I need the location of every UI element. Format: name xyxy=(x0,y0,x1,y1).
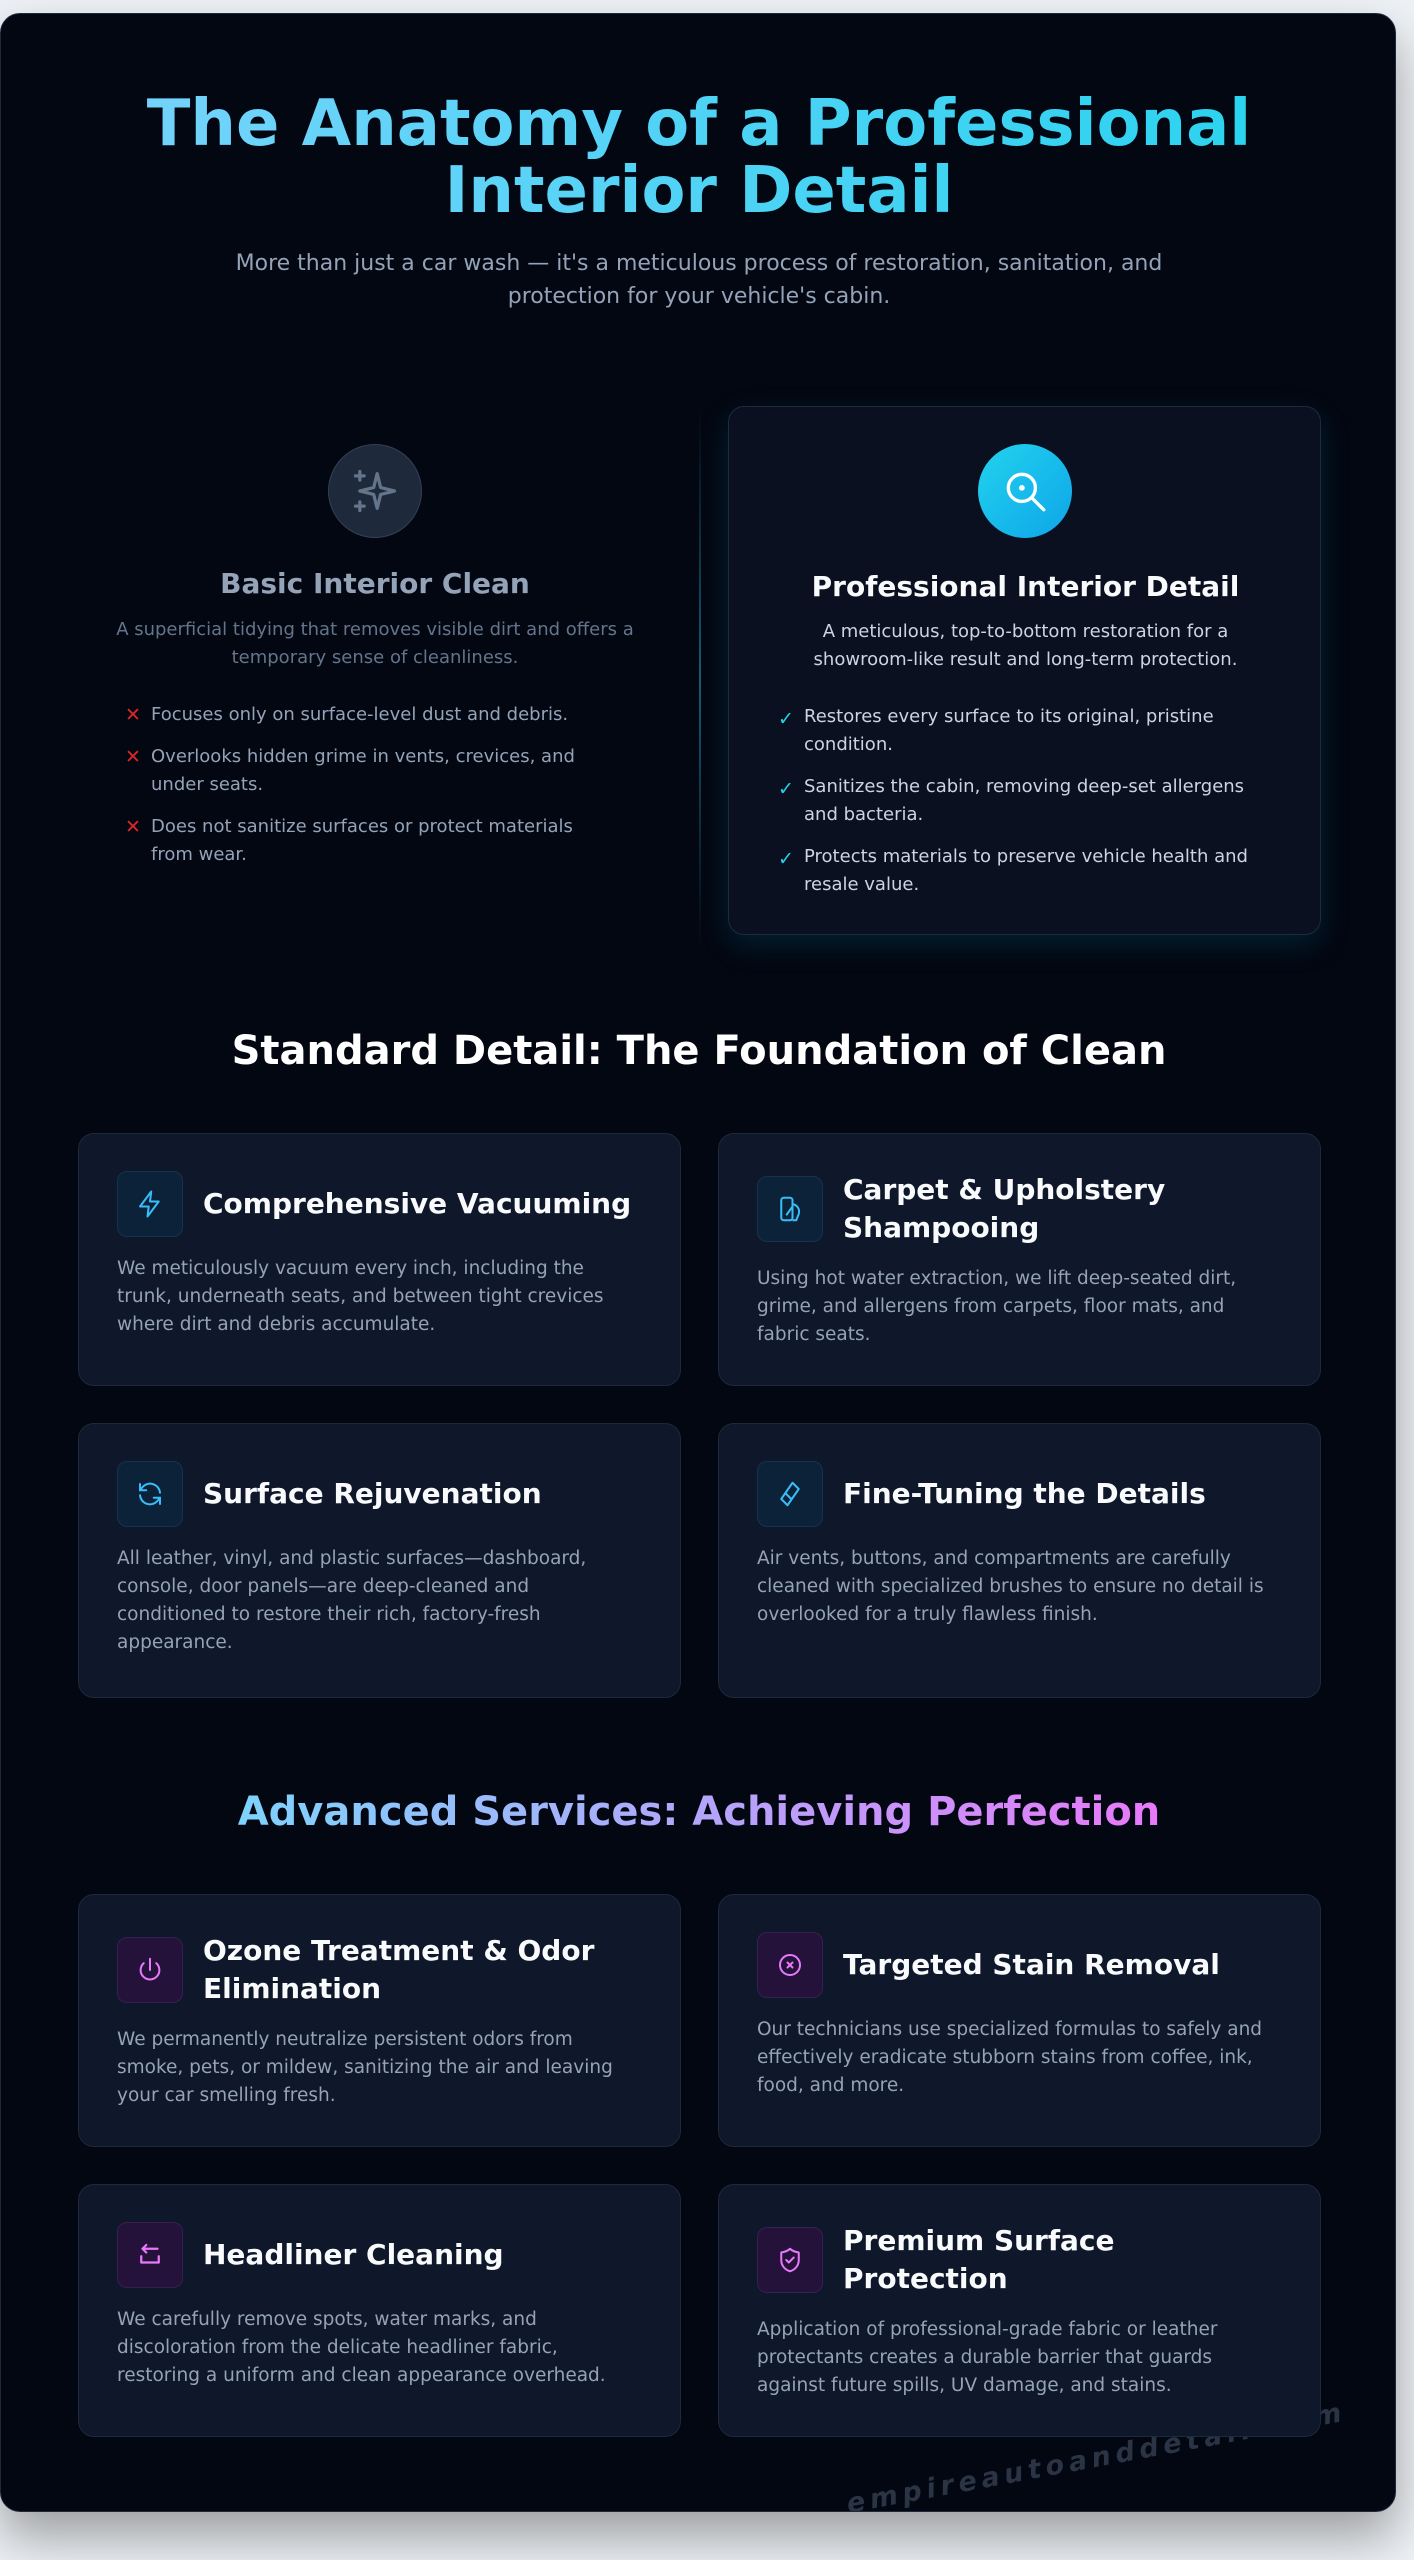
card: fine-tuning xyxy=(718,1423,1321,1698)
list: benefits: Protects materials to preserve vehicle health and resale value. xyxy=(804,846,1248,895)
card: headliner xyxy=(78,2184,681,2437)
list: benefits: Restores every surface to its original, pristine condition. xyxy=(804,706,1214,755)
card: ozone: Ozone Treatment & Odor Elimination xyxy=(203,1934,594,2005)
icon: shield check xyxy=(757,2227,823,2293)
icon: eraser xyxy=(757,1461,823,1527)
card: surface protection: Protection xyxy=(843,2262,1008,2295)
card: stain removal: Targeted Stain Removal xyxy=(843,1948,1220,1981)
panel: basic interior clean xyxy=(116,444,634,865)
card: ozone: We permanently neutralize persistent odors from smoke, pets, or mildew, sanitizing the air and leaving your car smelling fresh. xyxy=(117,2029,613,2106)
card: headliner: Headliner Cleaning xyxy=(203,2238,504,2271)
icon: sparkles xyxy=(328,444,422,538)
divider xyxy=(699,409,701,949)
card: fine-tuning: Air vents, buttons, and compartments are carefully cleaned with specialized brushes to ensure no detail is overlooked for a truly flawless finish. xyxy=(757,1548,1264,1625)
card: surface protection: Application of professional-grade fabric or leather protectants creates a durable barrier that guards against future spills, UV damage, and stains. xyxy=(757,2319,1217,2396)
list: drawbacks xyxy=(125,704,575,865)
title: The Anatomy of a Professional xyxy=(147,87,1251,161)
card: surface rejuvenation: All leather, vinyl, and plastic surfaces—dashboard, console, door panels—are deep-cleaned and conditioned to restore their rich, factory-fresh appearance. xyxy=(117,1548,586,1653)
panel: professional interior detail xyxy=(728,406,1321,935)
card: stain removal xyxy=(718,1894,1321,2147)
card: comprehensive vacuuming xyxy=(78,1133,681,1386)
heading: Basic Interior Clean xyxy=(220,567,530,600)
panel: basic interior clean: ✕ xyxy=(125,704,141,726)
card: stain removal: Our technicians use specialized formulas to safely and effectively eradicate stubborn stains from coffee, ink, food, and more. xyxy=(757,2019,1262,2096)
card: surface rejuvenation xyxy=(78,1423,681,1698)
panel: professional interior detail: ✓ xyxy=(778,708,794,730)
card: surface protection: Premium Surface xyxy=(843,2224,1115,2257)
list: benefits xyxy=(778,706,1248,895)
description: A meticulous, top-to-bottom restoration for a showroom-like result and long-term protection. xyxy=(814,621,1237,670)
heading: standard detail: Standard Detail: The Foundation of Clean xyxy=(232,1028,1166,1074)
heading: Professional Interior Detail xyxy=(812,570,1239,603)
card: fine-tuning: Fine-Tuning the Details xyxy=(843,1477,1206,1510)
list: drawbacks: Does not sanitize surfaces or protect materials from wear. xyxy=(151,816,573,865)
card: carpet shampooing: Carpet & Upholstery Shampooing xyxy=(843,1173,1165,1244)
icon: power xyxy=(117,1937,183,2003)
icon: lightning xyxy=(117,1171,183,1237)
description: A superficial tidying that removes visible dirt and offers a temporary sense of cleanliness. xyxy=(116,619,634,668)
icon: headliner xyxy=(117,2222,183,2288)
subtitle: More than just a car wash — it's a meticulous process of restoration, sanitation, and protection for your vehicle's cabin. xyxy=(236,251,1162,309)
title: Interior Detail xyxy=(445,154,953,228)
icon: x circle xyxy=(757,1932,823,1998)
card: ozone xyxy=(78,1894,681,2147)
card: comprehensive vacuuming: Comprehensive Vacuuming xyxy=(203,1187,631,1220)
card: comprehensive vacuuming: We meticulously vacuum every inch, including the trunk, underneath seats, and between tight crevices where dirt and debris accumulate. xyxy=(117,1258,604,1335)
list: benefits: Sanitizes the cabin, removing deep-set allergens and bacteria. xyxy=(804,776,1244,825)
icon: bottle xyxy=(757,1176,823,1242)
card: headliner: We carefully remove spots, water marks, and discoloration from the delicate headliner fabric, restoring a uniform and clean appearance overhead. xyxy=(117,2309,606,2386)
card: carpet shampooing: Using hot water extraction, we lift deep-seated dirt, grime, and allergens from carpets, floor mats, and fabric seats. xyxy=(757,1268,1236,1345)
card: surface protection xyxy=(718,2184,1321,2437)
icon: refresh xyxy=(117,1461,183,1527)
card: carpet shampooing xyxy=(718,1133,1321,1386)
icon: magnifier xyxy=(978,444,1072,538)
panel: professional interior detail: ✓ xyxy=(778,848,794,870)
heading: advanced services: Advanced Services: Achieving Perfection xyxy=(238,1789,1160,1835)
panel: basic interior clean: ✕ xyxy=(125,816,141,838)
list: drawbacks: Focuses only on surface-level dust and debris. xyxy=(151,704,568,725)
panel: professional interior detail: ✓ xyxy=(778,778,794,800)
panel: basic interior clean: ✕ xyxy=(125,746,141,768)
title xyxy=(1,91,1397,225)
list: drawbacks: Overlooks hidden grime in vents, crevices, and under seats. xyxy=(151,746,575,795)
card: surface rejuvenation: Surface Rejuvenation xyxy=(203,1477,542,1510)
